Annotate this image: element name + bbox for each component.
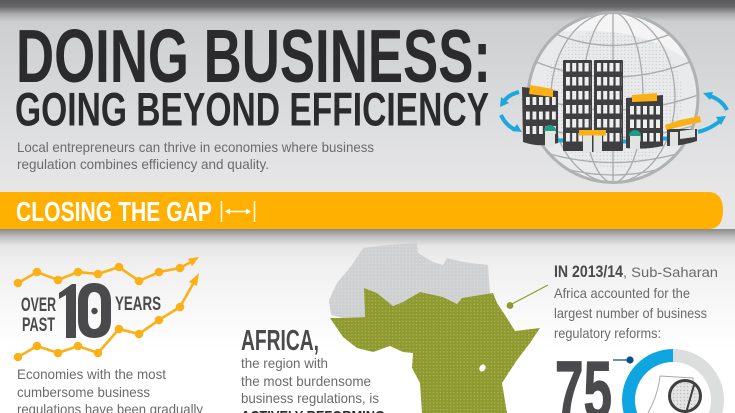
- reforms line 2: Africa accounted for the: [554, 285, 690, 301]
- map: sub-Saharan Africa: [330, 288, 540, 413]
- intro line 2: regulation combines efficiency and quality.: [17, 156, 269, 172]
- intro line 1: Local entrepreneurs can thrive in economies where business: [17, 139, 374, 155]
- building: right office: [626, 93, 663, 149]
- background: lower section: [0, 229, 735, 413]
- label: years: YEARS: [115, 294, 161, 315]
- building: corner shop: [665, 116, 701, 146]
- background: header: [0, 0, 735, 230]
- globe: [528, 12, 698, 182]
- title line 1: DOING BUSINESS:: [16, 14, 491, 98]
- reforms line 1: , Sub-Saharan: [623, 264, 718, 280]
- label: over past: [21, 295, 56, 336]
- panel: Africa text: [241, 325, 385, 413]
- icon: gap arrows: [222, 201, 254, 222]
- banner heading: CLOSING THE GAP: [16, 196, 212, 227]
- panel: over past 10 years: [14, 257, 203, 413]
- reforms line 4: regulatory reforms:: [554, 325, 661, 341]
- label: over past: OVER: [21, 295, 56, 316]
- panel: 2013/14 reforms: [554, 262, 724, 413]
- pointer: [613, 356, 634, 364]
- trend lines: [14, 257, 199, 361]
- map: Africa: [329, 243, 548, 413]
- Africa line 1: the region with: [241, 355, 328, 371]
- reforms text: [554, 262, 718, 341]
- title line 2: GOING BEYOND EFFICIENCY: [15, 82, 489, 136]
- economies line 2: cumbersome business: [17, 384, 150, 400]
- map: north Africa: [329, 243, 490, 318]
- economies text: [17, 366, 203, 413]
- reforms line 3: largest number of business: [554, 305, 707, 321]
- Africa line 2: the most burdensome: [241, 373, 371, 389]
- building: left office: [522, 85, 558, 147]
- donut chart: [622, 349, 724, 413]
- intro text: [17, 139, 374, 172]
- building: twin towers: [563, 60, 623, 152]
- Africa body: [241, 355, 379, 406]
- callout leader: [507, 285, 548, 309]
- Africa line 3: business regulations, is: [241, 390, 379, 406]
- title: [15, 14, 491, 136]
- illustration: globe with buildings: [500, 12, 727, 182]
- number: 10: [59, 283, 111, 338]
- Africa heading: AFRICA,: [241, 325, 319, 357]
- blue orbit arrows: [500, 92, 727, 142]
- economies line 1: Economies with the most: [17, 366, 166, 382]
- banner: closing the gap: [0, 192, 723, 229]
- reforms year: IN 2013/14: [554, 262, 623, 281]
- label: over past: PAST: [22, 315, 55, 336]
